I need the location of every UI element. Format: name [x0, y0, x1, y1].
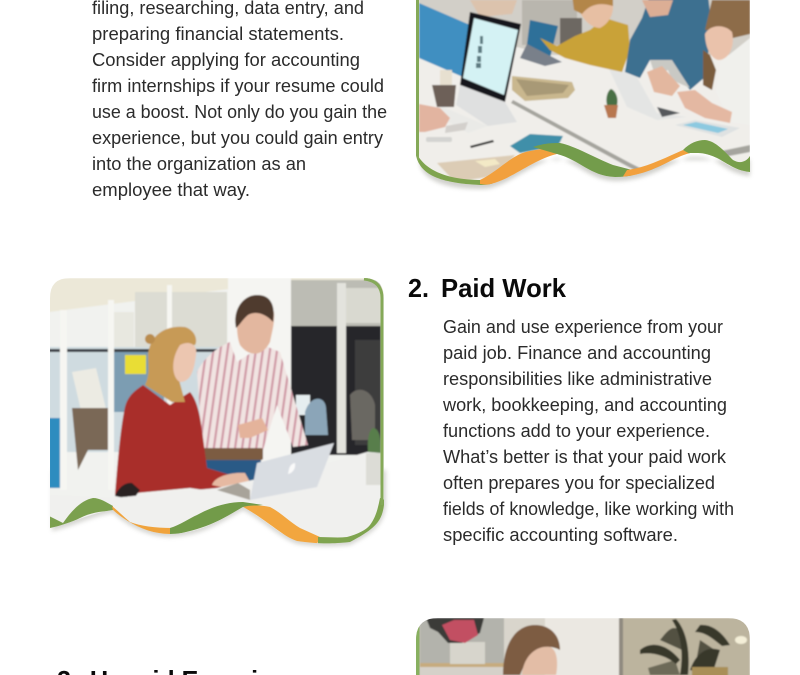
- wave ribbon: [416, 140, 750, 186]
- wave ribbon: [49, 498, 385, 544]
- photo: woman at desk, cut off by the page edge: [416, 618, 750, 675]
- text block: internships paragraph: experience, but you could gain entry: [92, 128, 383, 148]
- text block: paid work paragraph: often prepares you for specialized: [443, 473, 715, 493]
- text block: paid work paragraph: What’s better is that your paid work: [443, 447, 727, 467]
- text block: internships paragraph: use a boost. Not only do you gain the: [92, 102, 387, 122]
- text block: paid work paragraph: fields of knowledge, like working with: [443, 499, 734, 519]
- text block: paid work paragraph: functions add to your experience.: [443, 421, 710, 441]
- text block: internships paragraph: preparing financial statements.: [92, 24, 344, 44]
- text block: internships paragraph: [92, 0, 387, 200]
- text block: paid work paragraph: paid job. Finance and accounting: [443, 343, 711, 363]
- text block: internships paragraph: into the organization as an: [92, 154, 306, 174]
- text block: paid work paragraph: responsibilities like administrative: [443, 369, 712, 389]
- heading: 2. Paid Work: Paid Work: [441, 273, 567, 303]
- text block: internships paragraph: firm internships if your resume could: [92, 76, 384, 96]
- photo: team working around an office table: [416, 0, 750, 190]
- photo: two colleagues at a laptop: [49, 278, 386, 550]
- text block: paid work paragraph: [442, 317, 734, 545]
- text block: paid work paragraph: Gain and use experience from your: [443, 317, 723, 337]
- heading: 2. Paid Work: 2.: [408, 273, 429, 303]
- text block: internships paragraph: Consider applying for accounting: [92, 50, 360, 70]
- text block: internships paragraph: employee that way.: [92, 180, 250, 200]
- text block: paid work paragraph: specific accounting software.: [443, 525, 678, 545]
- text block: paid work paragraph: work, bookkeeping, and accounting: [442, 395, 727, 415]
